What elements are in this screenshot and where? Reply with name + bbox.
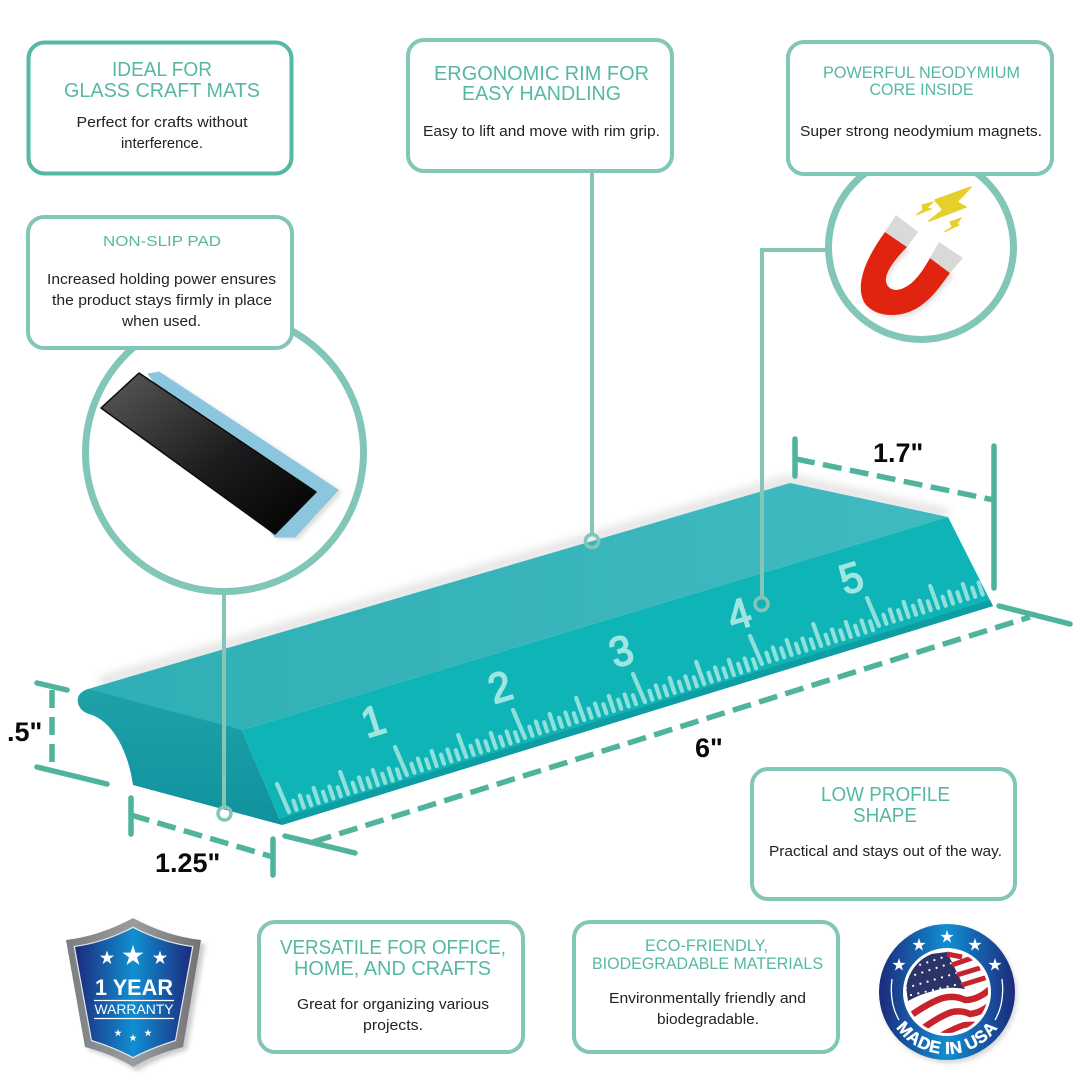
card: ergonomic rim: ERGONOMIC RIM FOR <box>434 63 649 85</box>
card: eco-friendly <box>574 922 838 1052</box>
card: eco-friendly: Environmentally friendly and <box>609 990 806 1007</box>
icon: horseshoe magnet <box>861 187 971 317</box>
card: ergonomic rim: Easy to lift and move with rim grip. <box>423 123 660 140</box>
card: neodymium core: Super strong neodymium magnets. <box>800 123 1042 140</box>
dimension: 1.7 inch <box>795 438 994 588</box>
ruler numerals <box>355 552 869 747</box>
card: versatile: HOME, AND CRAFTS <box>294 958 491 980</box>
badge: made in USA: MADE IN USA <box>896 1020 998 1054</box>
card: low profile shape: Practical and stays out of the way. <box>769 843 1002 860</box>
dimension: 1.7 inch: 1.7" <box>873 438 923 468</box>
ruler shadow <box>100 480 948 682</box>
ruler numerals: 1 <box>355 695 391 747</box>
card: eco-friendly: ECO-FRIENDLY, <box>645 936 768 955</box>
card: neodymium core: CORE INSIDE <box>870 80 974 99</box>
card: low profile shape <box>752 769 1015 899</box>
card: low profile shape: LOW PROFILE <box>821 784 950 806</box>
ruler ticks <box>277 582 990 812</box>
dimension: 1.25 inch: 1.25" <box>155 848 220 878</box>
card: non-slip pad: the product stays firmly in place <box>52 292 272 309</box>
dimension: 6 inch <box>285 606 1070 853</box>
card: versatile: Great for organizing various <box>297 996 489 1013</box>
ruler numerals: 4 <box>721 588 757 640</box>
zoom circle: magnet <box>828 154 1014 340</box>
card: eco-friendly: BIODEGRADABLE MATERIALS <box>592 954 823 973</box>
leader lines <box>218 172 826 820</box>
ruler product <box>78 480 993 825</box>
card: neodymium core: POWERFUL NEODYMIUM <box>823 63 1020 82</box>
card: versatile: VERSATILE FOR OFFICE, <box>280 937 506 959</box>
card: glass craft mats: GLASS CRAFT MATS <box>64 80 260 102</box>
card: ergonomic rim: EASY HANDLING <box>462 83 621 105</box>
badge: 1 year warranty <box>66 918 205 1071</box>
card: non-slip pad: when used. <box>121 313 201 330</box>
card: versatile: projects. <box>363 1017 423 1034</box>
dimension: 6 inch: 6" <box>695 733 723 763</box>
icon: non-slip pad <box>101 372 342 539</box>
card: eco-friendly: biodegradable. <box>657 1011 759 1028</box>
dimension: .5 inch <box>7 683 107 784</box>
icon: american flag <box>905 952 990 1035</box>
card: non-slip pad: Increased holding power ensures <box>47 271 276 288</box>
badge: 1 year warranty: 1 YEAR <box>95 975 173 1000</box>
card: non-slip pad: NON-SLIP PAD <box>103 233 221 250</box>
card: ergonomic rim <box>408 40 672 171</box>
badge: made in USA <box>879 924 1019 1065</box>
zoom circle: non-slip pad <box>86 314 364 592</box>
ruler scale face <box>242 517 993 825</box>
ruler numerals: 5 <box>833 552 869 604</box>
card: neodymium core <box>788 42 1052 174</box>
ruler end face <box>78 689 282 825</box>
ruler top face <box>88 483 948 730</box>
card: glass craft mats: Perfect for crafts without <box>76 114 248 131</box>
badge: 1 year warranty: WARRANTY <box>94 1001 174 1017</box>
ruler numerals: 2 <box>482 661 518 713</box>
card: non-slip pad <box>28 217 292 348</box>
card: glass craft mats: IDEAL FOR <box>112 59 212 81</box>
ruler numerals: 3 <box>603 625 639 677</box>
card: glass craft mats <box>28 42 292 174</box>
dimension: .5 inch: .5" <box>7 717 42 747</box>
card: glass craft mats: interference. <box>121 135 203 152</box>
card: low profile shape: SHAPE <box>853 805 917 827</box>
dimension: 1.25 inch <box>131 798 273 878</box>
card: versatile <box>259 922 523 1052</box>
